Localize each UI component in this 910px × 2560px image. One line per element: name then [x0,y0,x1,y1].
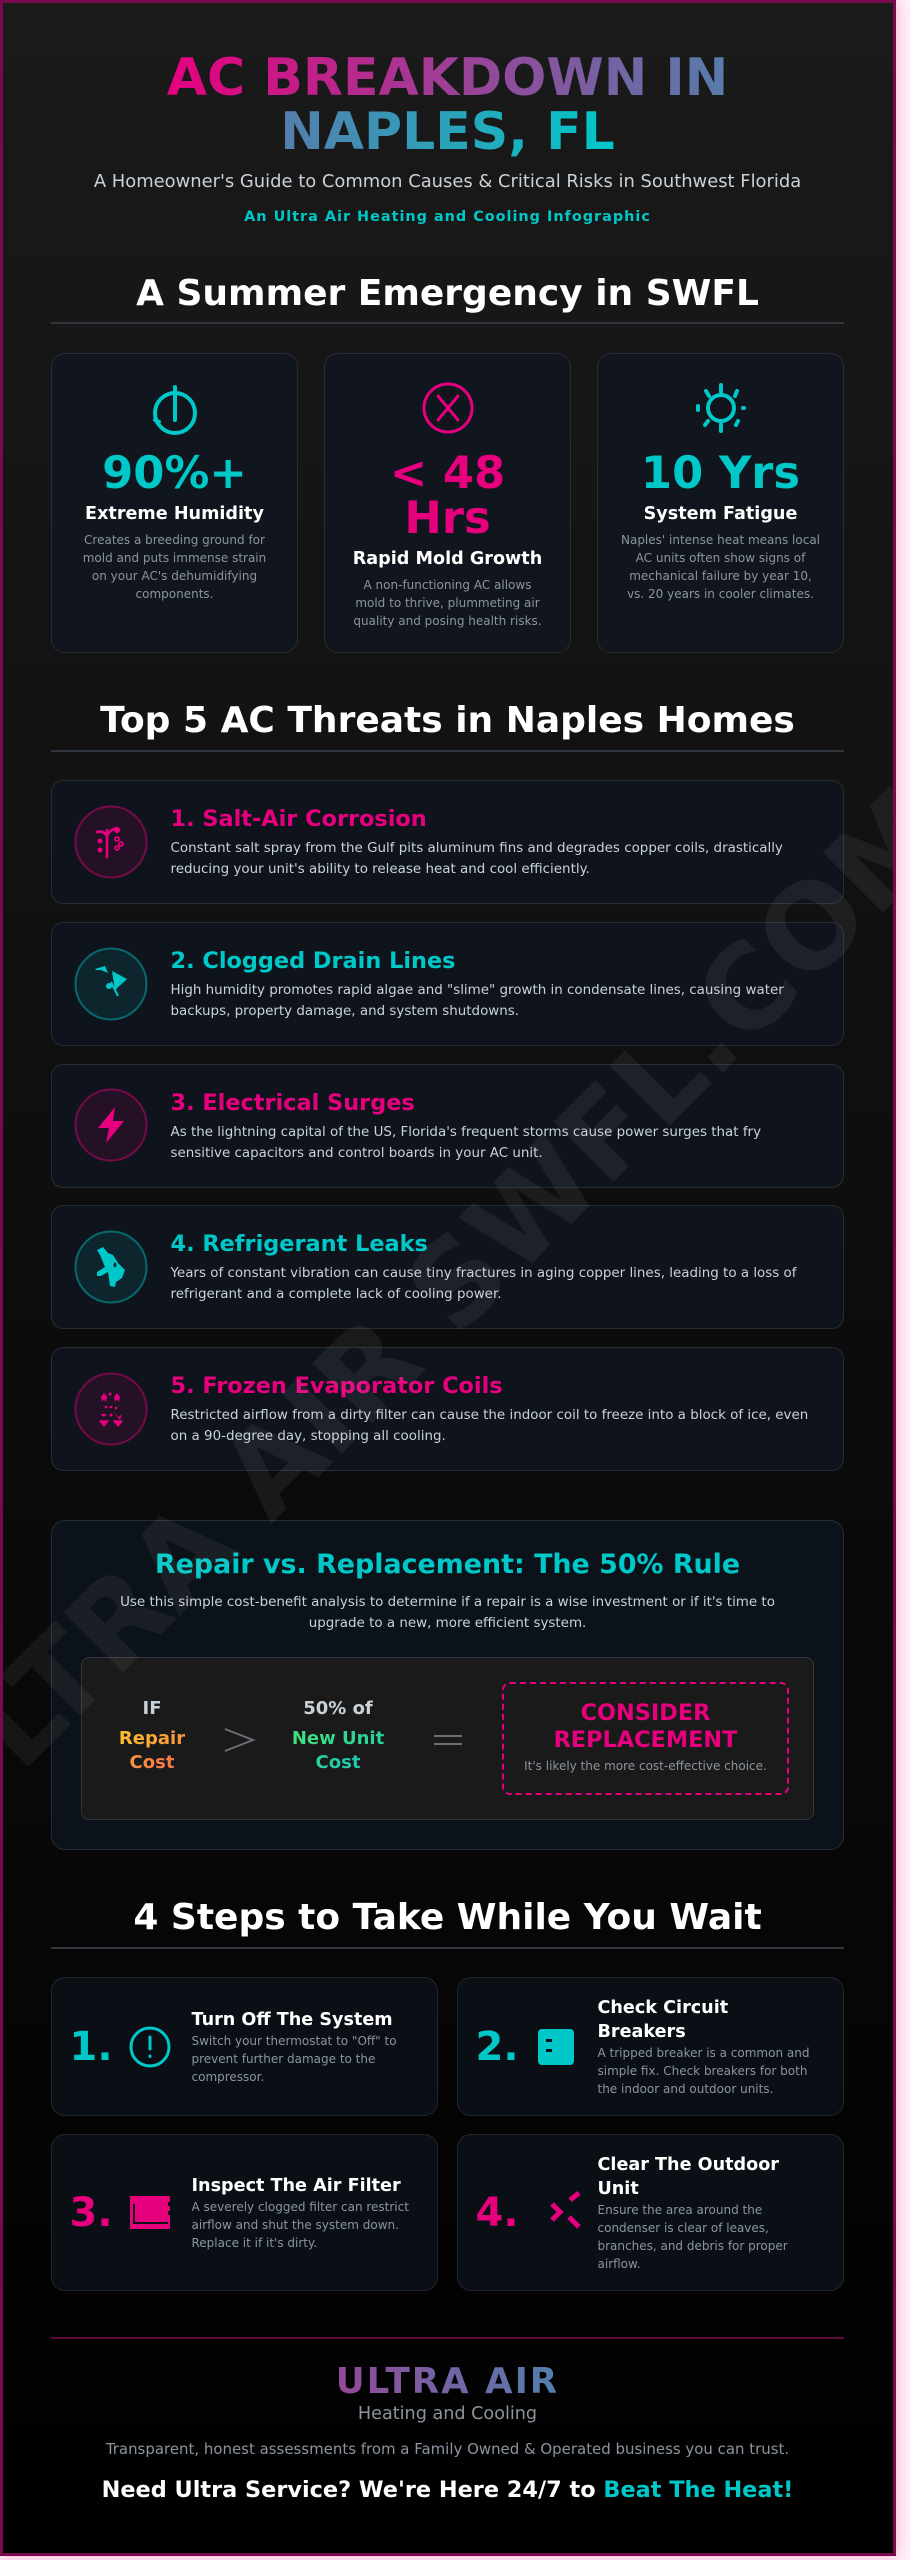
step text: airflow and shut the system down. [192,2218,399,2232]
icon: breaker [538,2029,574,2065]
threat text: on a 90-degree day, stopping all cooling. [170,1429,446,1444]
formula box [81,1657,814,1820]
panel: extreme humidity [51,353,298,653]
threat text: reducing your unit's ability to release heat and cool efficiently. [170,862,590,877]
threat text: refrigerant and a complete lack of cooling power. [170,1287,502,1302]
threat text: sensitive capacitors and control boards in your AC unit. [170,1146,543,1160]
formula: repair cost: Repair [119,1728,185,1749]
stat text: mold: Rapid Mold Growth [353,549,542,569]
panel: step 2 [457,1977,844,2116]
panel: rapid mold growth [324,353,571,653]
panel: 50% rule [51,1520,844,1850]
heading: top threats: Top 5 AC Threats in Naples Homes [100,700,795,741]
step text: Switch your thermostat to "Off" to [192,2034,397,2048]
formula: repair cost: Cost [130,1752,174,1773]
tagline: An Ultra Air Heating and Cooling Infographic [244,209,651,225]
icon: alert [130,2026,170,2068]
icon: corrosion [74,806,148,878]
symbol: greater than [224,1728,256,1752]
footer statement: Transparent, honest assessments from a Family Owned & Operated business you can trust. [106,2440,789,2458]
panel: threat 3 [51,1064,844,1188]
step text: Replace it if it's dirty. [192,2236,317,2250]
step text: Breakers [598,2022,686,2042]
stat text: mold: < 48 [390,446,505,499]
step text: Clear The Outdoor [598,2154,779,2174]
subtitle: A Homeowner's Guide to Common Causes & Critical Risks in Southwest Florida [94,171,801,192]
panel: step 1 [51,1977,438,2116]
step text [598,2154,788,2270]
formula: new unit cost [292,1698,384,1773]
icon: sun [696,383,746,433]
rule description: Use this simple cost-benefit analysis to determine if a repair is a wise investment or if it's time to [120,1595,775,1610]
stat text: mold: quality and posing health risks. [353,614,542,628]
icon: clear debris [550,2191,581,2229]
icon: clogged drain flags [74,948,148,1020]
callout: consider replacement [502,1682,789,1795]
stat text: mold: mold to thrive, plummeting air [355,596,540,610]
title [167,48,728,162]
stat text: humidity: components. [136,587,213,601]
footer logo: ULTRA AIR [336,2361,559,2402]
step text: prevent further damage to the [192,2052,375,2066]
threat text: Years of constant vibration can cause tiny fractures in aging copper lines, leading to a loss of [170,1266,797,1281]
formula: new unit cost: 50% of [303,1698,373,1719]
stat text: fatigue: System Fatigue [644,504,797,524]
stat text: fatigue [621,446,820,601]
step text [192,2176,409,2250]
panel: threat 1 [51,780,844,904]
rule description: upgrade to a new, more efficient system. [309,1616,586,1631]
rule heading: Repair vs. Replacement: The 50% Rule [155,1549,740,1580]
icon: crossed circle [422,382,474,434]
stat text: mold: A non-functioning AC allows [364,578,531,592]
step text: simple fix. Check breakers for both [598,2064,807,2078]
step text: condenser is clear of leaves, [598,2220,769,2234]
formula: repair cost [119,1698,185,1773]
footer call to action: Need Ultra Service? We're Here 24/7 to Beat The Heat! [102,2477,793,2503]
stat text: humidity: Extreme Humidity [85,504,264,524]
step number: 1. [70,2024,113,2070]
stat text: humidity: 90%+ [102,446,247,499]
stat text: humidity: mold and puts immense strain [83,551,266,565]
title: AC BREAKDOWN IN [167,48,728,108]
stat text: humidity: on your AC's dehumidifying [92,569,257,583]
step text: branches, and debris for proper [598,2238,788,2252]
step text: Check Circuit [598,1998,728,2018]
symbol: equals [434,1735,462,1745]
callout heading: REPLACEMENT [554,1726,737,1752]
divider: footer [51,2337,844,2339]
threat text [170,1408,808,1444]
formula: new unit cost: Cost [316,1752,360,1773]
callout heading: CONSIDER [581,1700,710,1726]
rule description [120,1595,775,1631]
formula: new unit cost: New Unit [292,1728,384,1749]
step text: compressor. [192,2070,264,2084]
callout note: It's likely the more cost-effective choice. [524,1759,767,1773]
threat text: backups, property damage, and system shutdowns. [170,1004,519,1019]
icon: air filter [130,2196,170,2229]
threat text [170,983,784,1019]
step text [192,2010,397,2084]
threat title: 3. Electrical Surges [170,1090,415,1116]
step text: Ensure the area around the [598,2202,762,2216]
callout heading [554,1700,738,1752]
step text: Unit [598,2178,639,2198]
threat text: Constant salt spray from the Gulf pits aluminum fins and degrades copper coils, drastically [170,841,783,856]
step number: 3. [70,2190,113,2236]
stat text: fatigue: mechanical failure by year 10, [629,569,812,583]
title: NAPLES, FL [280,102,615,162]
step number: 2. [476,2024,519,2070]
icon: humidity gauge [152,385,197,435]
step number: 4. [476,2190,519,2236]
threat text [170,1124,761,1160]
threat title: 5. Frozen Evaporator Coils [170,1373,503,1399]
panel: system fatigue [597,353,844,653]
formula: repair cost: IF [142,1698,162,1719]
step text: A severely clogged filter can restrict [192,2200,409,2214]
step text: the indoor and outdoor units. [598,2082,773,2096]
threat title: 4. Refrigerant Leaks [170,1231,428,1257]
footer logo [51,2359,844,2405]
stat text: mold: Hrs [404,491,491,544]
step text: Turn Off The System [192,2010,393,2030]
stat text: fatigue: vs. 20 years in cooler climates. [627,587,814,601]
step text [598,1998,809,2096]
panel: step 4 [457,2134,844,2291]
panel: step 3 [51,2134,438,2291]
threat text: High humidity promotes rapid algae and "slime" growth in condensate lines, causing water [170,983,784,998]
threat title: 1. Salt-Air Corrosion [170,806,427,832]
heading: steps: 4 Steps to Take While You Wait [133,1897,762,1938]
step text: Inspect The Air Filter [192,2176,401,2196]
stat text: mold [353,446,542,628]
stat text: humidity: Creates a breeding ground for [84,533,265,547]
threat text [170,841,783,877]
panel: threat 5 [51,1347,844,1471]
stat text: humidity [83,446,266,601]
footer sublogo: Heating and Cooling [358,2404,537,2424]
panel: threat 2 [51,922,844,1046]
heading: summer emergency: A Summer Emergency in SWFL [136,273,759,314]
stat text: fatigue: 10 Yrs [641,446,800,499]
step text: A tripped breaker is a common and [598,2046,809,2060]
icon: frozen coil [74,1372,148,1446]
threat text [170,1266,797,1302]
icon: lightning bolt [74,1088,148,1162]
threat text: Restricted airflow from a dirty filter can cause the indoor coil to freeze into a block of ice, even [170,1408,808,1423]
stat text: fatigue: AC units often show signs of [636,551,805,565]
stat text: fatigue: Naples' intense heat means local [621,533,820,547]
step text: airflow. [598,2256,641,2270]
threat text: As the lightning capital of the US, Florida's frequent storms cause power surges that fry [170,1124,761,1140]
panel: threat 4 [51,1205,844,1329]
threat title: 2. Clogged Drain Lines [170,948,455,974]
icon: refrigerant leak [74,1230,148,1304]
